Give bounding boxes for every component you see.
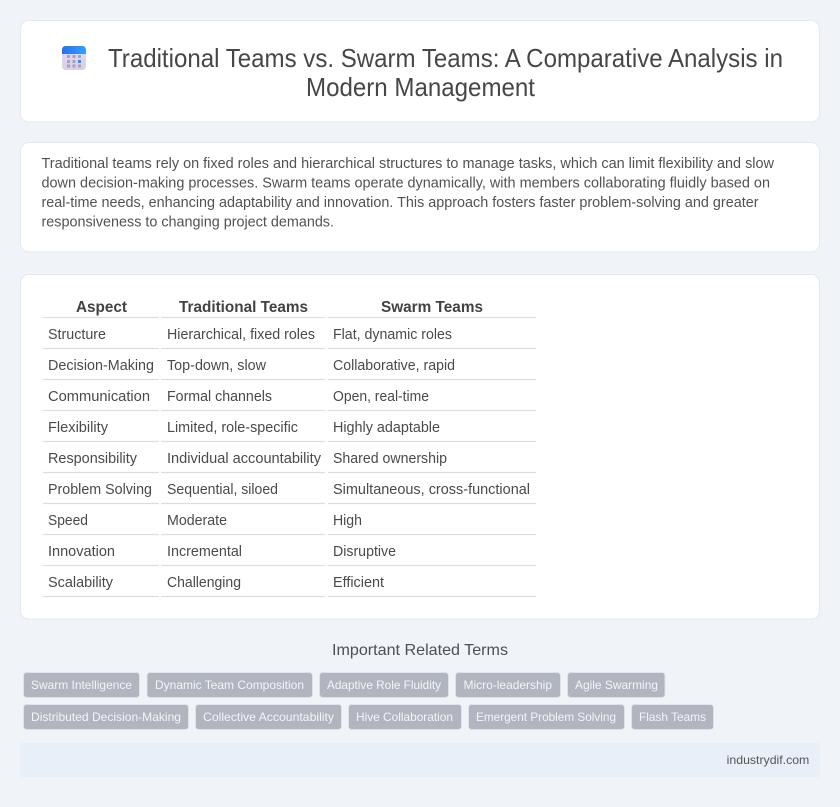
icon: calendar <box>62 46 86 70</box>
tag: Distributed Decision-Making: Distributed Decision-Making <box>31 710 181 724</box>
title <box>108 45 783 102</box>
row: Decision-Making: Top-down, slow <box>167 358 267 374</box>
panel: introduction <box>20 142 820 252</box>
row: Communication: Formal channels <box>167 389 272 405</box>
footer <box>20 743 820 777</box>
title: Traditional Teams vs. Swarm Teams: A Comparative Analysis in <box>108 45 783 73</box>
row: Decision-Making: Decision-Making <box>48 358 154 374</box>
text block: introduction: Traditional teams rely on fixed roles and hierarchical structures to manage tasks, which can limit flexibility and slow <box>42 156 775 172</box>
tag: Emergent Problem Solving: Emergent Problem Solving <box>476 710 616 724</box>
tag: Swarm Intelligence <box>24 672 140 698</box>
heading: related terms: Important Related Terms <box>332 642 508 659</box>
text block: introduction <box>42 156 775 230</box>
row: Speed: Speed <box>48 513 88 529</box>
row: Speed <box>48 513 362 529</box>
tag: Collective Accountability <box>196 704 342 730</box>
row: Problem Solving <box>48 482 530 498</box>
row: Problem Solving: Simultaneous, cross-functional <box>333 482 530 498</box>
tag: Swarm Intelligence: Swarm Intelligence <box>31 678 132 692</box>
text block: introduction: down decision-making processes. Swarm teams operate dynamically, with members collaborating fluidly based on <box>42 176 770 192</box>
row: Structure <box>48 327 452 343</box>
tag: Flash Teams: Flash Teams <box>639 710 706 724</box>
panel: comparison table <box>20 274 820 619</box>
row: Flexibility: Limited, role-specific <box>167 420 298 436</box>
row: Innovation: Incremental <box>167 544 242 560</box>
tag: Adaptive Role Fluidity: Adaptive Role Fluidity <box>327 678 441 692</box>
panel: term tags <box>24 672 714 730</box>
row: Problem Solving: Sequential, siloed <box>167 482 278 498</box>
tag: Adaptive Role Fluidity <box>320 672 448 698</box>
row: Speed: High <box>333 513 362 529</box>
row: Flexibility: Highly adaptable <box>333 420 440 436</box>
table header: Aspect <box>76 299 128 316</box>
row: Communication: Open, real-time <box>333 389 429 405</box>
tag: Dynamic Team Composition <box>147 672 312 698</box>
row: Structure: Flat, dynamic roles <box>333 327 452 343</box>
tag: Distributed Decision-Making <box>24 704 188 730</box>
tag: Flash Teams <box>632 704 714 730</box>
tag: Agile Swarming: Agile Swarming <box>575 678 658 692</box>
row: Decision-Making: Collaborative, rapid <box>333 358 455 374</box>
row: Problem Solving: Problem Solving <box>48 482 152 498</box>
text block: introduction: responsiveness to changing project demands. <box>42 214 334 230</box>
tag: Hive Collaboration <box>348 704 462 730</box>
footer: industrydif.com <box>727 753 809 767</box>
row: Responsibility: Responsibility <box>48 451 138 467</box>
row: Responsibility: Individual accountability <box>167 451 322 467</box>
table header: Traditional Teams <box>179 299 308 316</box>
row: Scalability <box>48 575 384 591</box>
row: Scalability: Scalability <box>48 575 114 591</box>
tag: Dynamic Team Composition: Dynamic Team Composition <box>155 678 304 692</box>
row: Flexibility <box>48 420 440 436</box>
table header: Swarm Teams <box>381 299 483 316</box>
row: Flexibility: Flexibility <box>48 420 109 436</box>
tag: Agile Swarming <box>568 672 665 698</box>
row: Speed: Moderate <box>167 513 227 529</box>
row: Decision-Making <box>48 358 455 374</box>
title: Modern Management <box>306 74 535 102</box>
row: Innovation: Disruptive <box>333 544 396 560</box>
row: Innovation: Innovation <box>48 544 115 560</box>
row: Communication <box>48 389 429 405</box>
row: Structure: Structure <box>48 327 106 343</box>
text block: introduction: real-time needs, enhancing adaptability and innovation. This approach fosters faster problem-solving and greater <box>42 195 759 211</box>
tag: Emergent Problem Solving <box>468 704 624 730</box>
row: Structure: Hierarchical, fixed roles <box>167 327 315 343</box>
tag: Collective Accountability: Collective Accountability <box>203 710 334 724</box>
row: Responsibility: Shared ownership <box>333 451 447 467</box>
row: Communication: Communication <box>48 389 150 405</box>
tag: Micro-leadership: Micro-leadership <box>464 678 552 692</box>
row: Scalability: Challenging <box>167 575 241 591</box>
panel: header <box>20 20 820 122</box>
row: Scalability: Efficient <box>333 575 384 591</box>
table header <box>76 299 483 316</box>
tag: Hive Collaboration: Hive Collaboration <box>356 710 453 724</box>
row: Innovation <box>48 544 396 560</box>
tag: Micro-leadership <box>456 672 560 698</box>
row: Responsibility <box>48 451 447 467</box>
